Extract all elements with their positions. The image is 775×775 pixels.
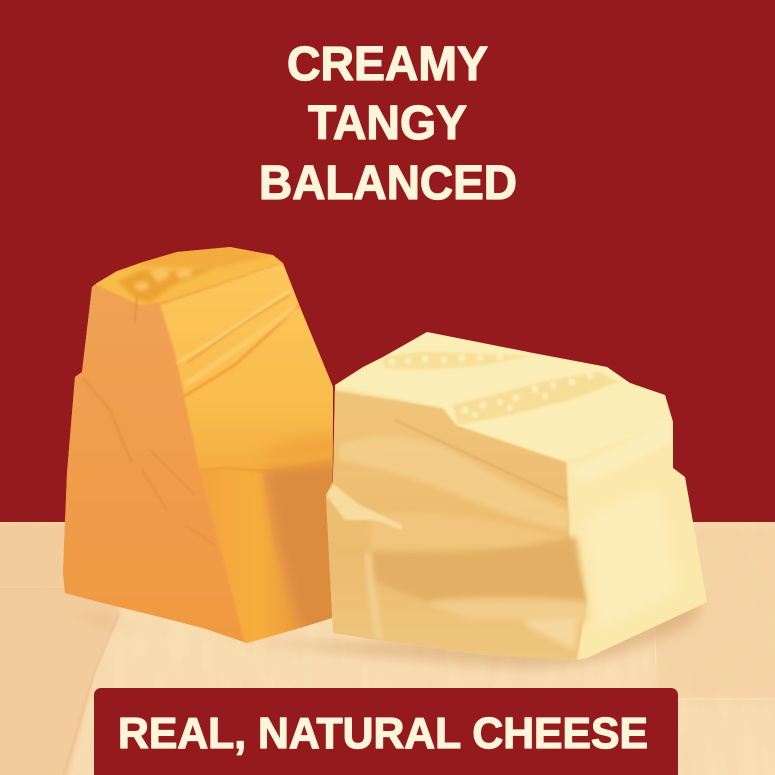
heading: creamy tangy balanced: CREAMY [287,38,488,91]
crumbled texture on top [382,352,618,425]
folds on left face [326,420,587,650]
ledge and lower right faces [200,470,300,650]
left face of white cheese [320,388,587,665]
right face of orange cheese [160,263,340,472]
left face of orange cheese [60,270,247,650]
top face of orange cheese [92,247,283,305]
pale white cheddar cheese block [320,332,710,665]
heading: creamy tangy balanced [259,38,517,210]
wooden table surface [0,522,775,775]
grooves on right face [177,290,300,397]
top face of white cheese [335,332,673,462]
orange cheddar cheese block [60,247,340,650]
banner: real, natural cheese: REAL, NATURAL CHEESE [118,709,648,758]
scratches on left face [83,296,215,545]
banner: real, natural cheese [94,688,678,775]
crumbled top texture [118,247,273,303]
heading: creamy tangy balanced: TANGY [308,97,467,150]
right face of white cheese [566,463,698,660]
heading: creamy tangy balanced: BALANCED [259,157,517,210]
